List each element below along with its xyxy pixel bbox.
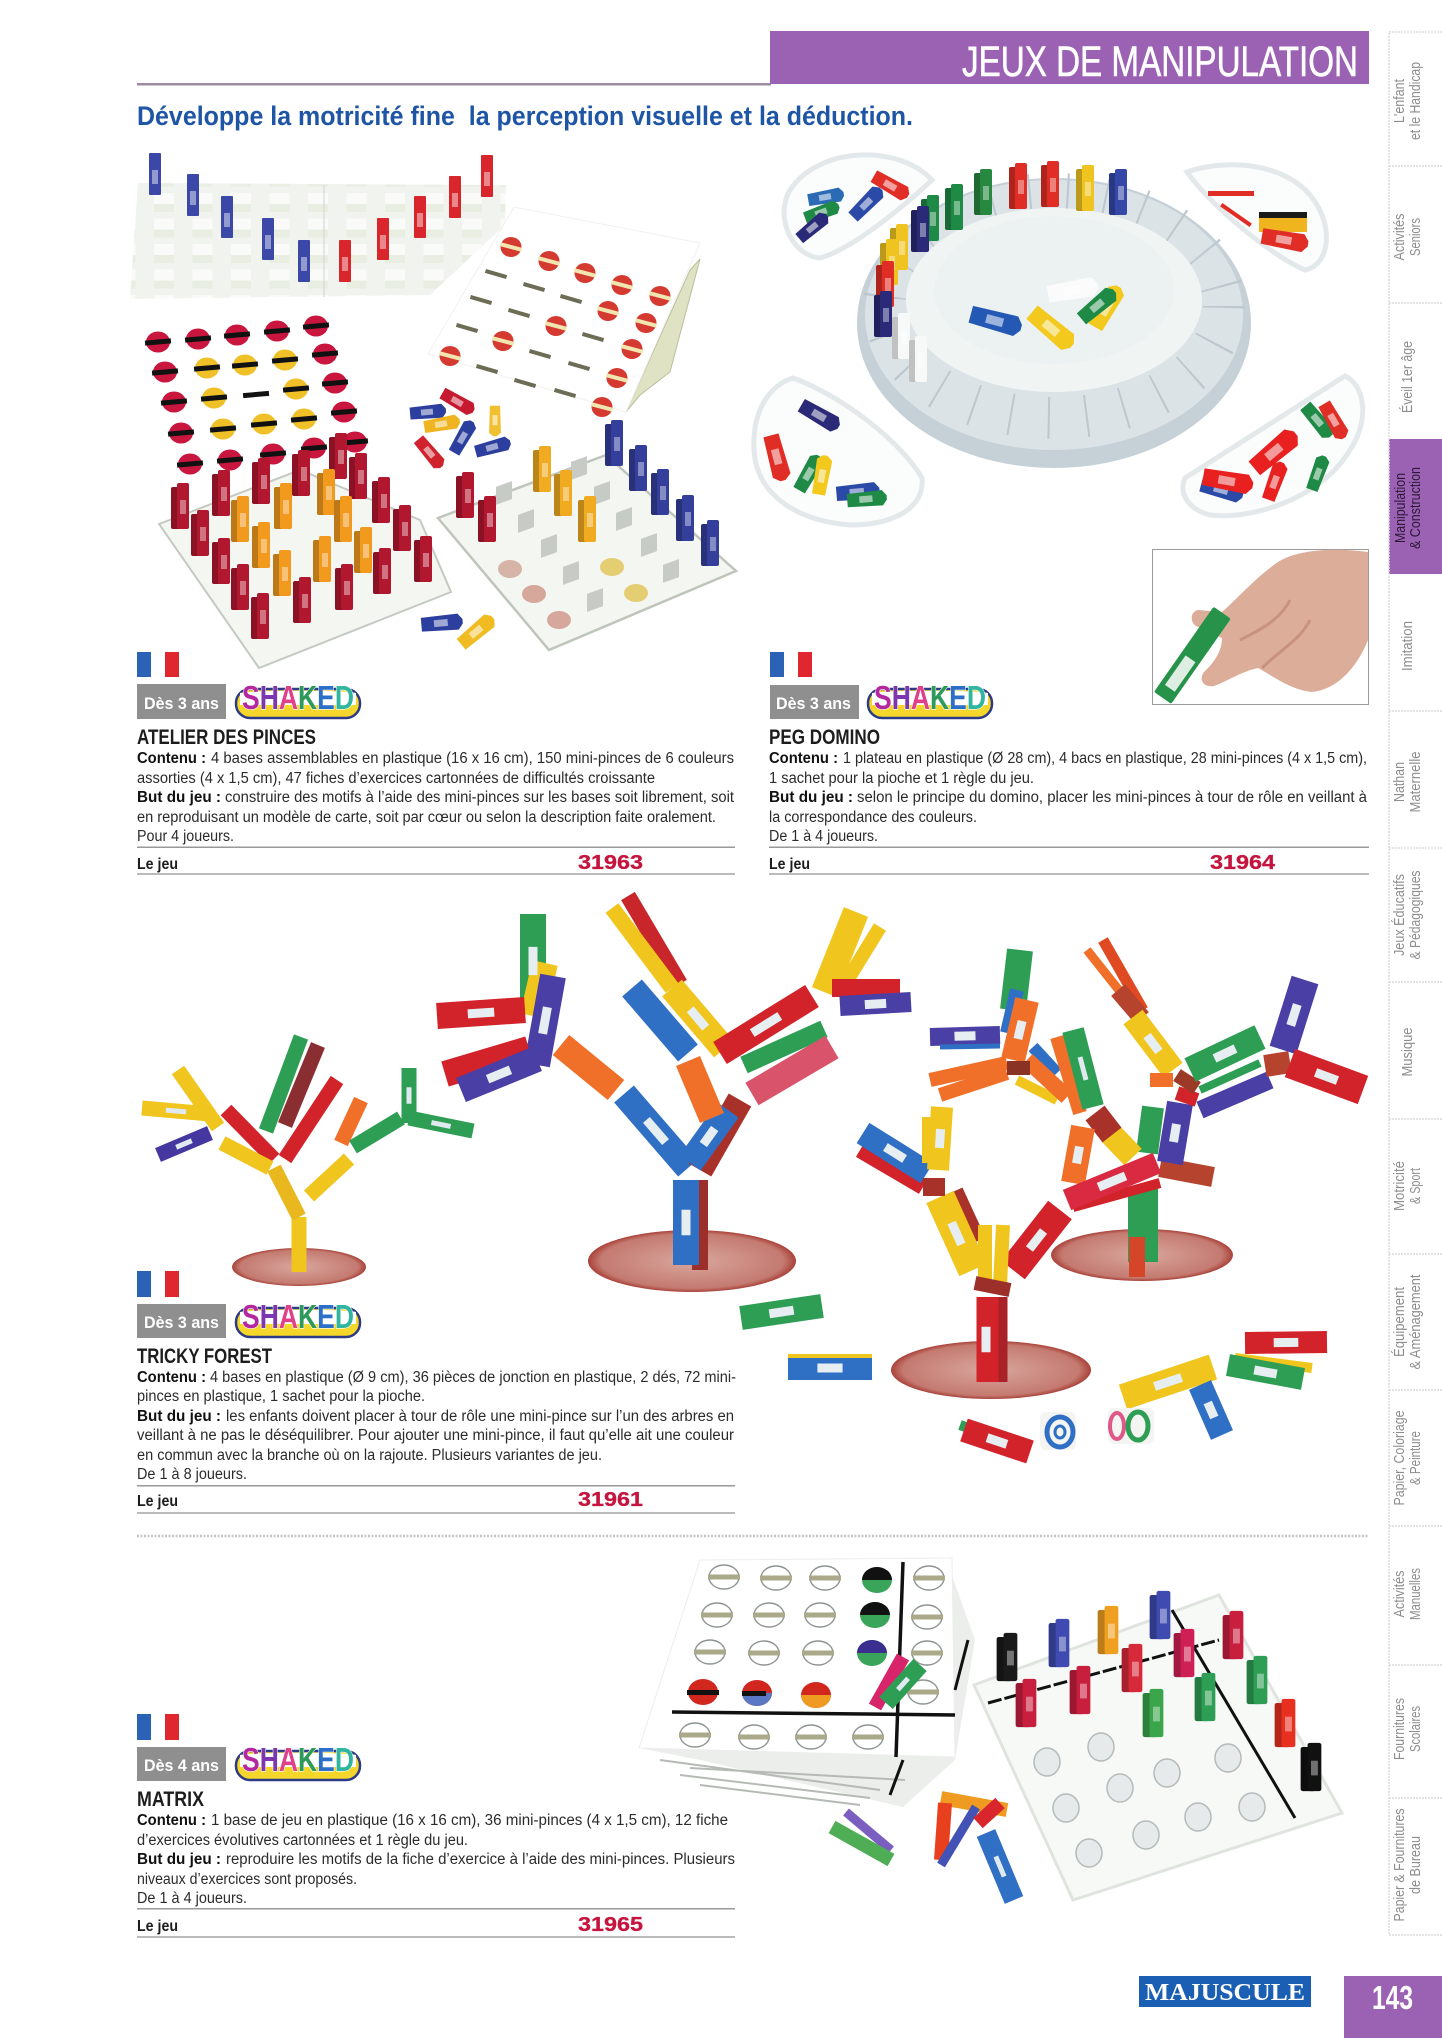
tab: manipulation active: [1393, 467, 1424, 549]
page number: 143: [1372, 1979, 1413, 2016]
loose mini-pinces: [409, 387, 512, 650]
age badge: [137, 1747, 226, 1781]
tab: handicap: et le Handicap: [1408, 62, 1424, 140]
price row: Le jeu: [137, 1493, 178, 1510]
price row: 31964: [1210, 852, 1276, 874]
product: atelier des pinces: [137, 652, 735, 875]
tab: motricite: & Sport: [1408, 1168, 1424, 1204]
description: Pour 4 joueurs.: [137, 828, 234, 845]
tab: activites manuelles: Manuelles: [1408, 1568, 1424, 1620]
shaked logo: SHAKED: [242, 1298, 354, 1335]
description: assorties (4 x 1,5 cm), 47 fiches d’exercices cartonnées de difficultés croissante: [137, 770, 655, 787]
tab: fournitures scolaires: Fournitures: [1392, 1698, 1408, 1760]
price row: [769, 846, 1369, 875]
front tree: [860, 1107, 1160, 1399]
description: d’exercices évolutives cartonnées et 1 règle du jeu.: [137, 1832, 468, 1849]
tab: manipulation active: & Construction: [1408, 467, 1424, 549]
tab: musique: Musique: [1400, 1028, 1416, 1076]
lower left board with pegs: [159, 433, 451, 668]
description: [137, 1812, 735, 1907]
round tray: [857, 178, 1251, 468]
price row: 31963: [578, 852, 643, 874]
tab: jeux educatifs: Jeux Éducatifs: [1391, 874, 1408, 956]
pegs on tray rim: [874, 161, 1127, 382]
age badge: Dès 4 ans: [144, 1756, 219, 1775]
product: peg domino: [769, 652, 1369, 875]
tab: nathan: Nathan: [1392, 762, 1408, 802]
tab: nathan: Maternelle: [1408, 752, 1424, 812]
tab: fournitures scolaires: Scolaires: [1408, 1706, 1424, 1752]
price row: 31965: [578, 1914, 643, 1936]
age badge: [137, 1304, 226, 1338]
description: veillant à ne pas le déséquilibrer. Pour ajouter une mini-pince, il faut qu’elle ait une couleur: [137, 1427, 734, 1444]
product title: TRICKY FOREST: [137, 1345, 272, 1368]
tab: fournitures bureau: de Bureau: [1408, 1836, 1424, 1894]
bowl: top right: [1187, 165, 1326, 270]
top board with blue and red pegs: [130, 153, 506, 299]
bowl: bottom right: [1183, 376, 1363, 516]
bowl: bottom left: [754, 378, 922, 525]
description: la correspondance des couleurs.: [769, 809, 977, 826]
illustration: matrix: [639, 1558, 1342, 1900]
illustration: tricky forest trees: [142, 896, 1363, 1452]
description: Contenu :: [769, 750, 838, 767]
description: reproduire les motifs de la fiche d’exercice à l’aide des mini-pinces. Plusieurs: [226, 1851, 735, 1868]
left card red and yellow discs: [145, 316, 368, 474]
tab: papier coloriage: [1392, 1410, 1424, 1506]
description: en reproduisant un modèle de carte, soit par cœur ou selon la description faite oralement.: [137, 809, 716, 826]
illustration: atelier des pinces: [130, 153, 736, 668]
flag: [137, 1271, 179, 1297]
description: [137, 1369, 736, 1483]
product title: PEG DOMINO: [769, 726, 880, 749]
tab: jeux educatifs: [1391, 870, 1424, 960]
age badge: [770, 685, 859, 719]
tab: manipulation active: Manipulation: [1393, 473, 1409, 543]
illustration: peg domino: [754, 155, 1368, 704]
tab: equipement: [1391, 1274, 1424, 1370]
product: tricky forest: [137, 1271, 736, 1514]
loose clips and dice: [741, 1306, 1327, 1452]
side navigation tabs: [1389, 32, 1442, 1935]
description: Contenu :: [137, 1369, 206, 1386]
tab: fournitures bureau: [1392, 1808, 1424, 1922]
flag: [137, 652, 179, 677]
stack of exercise cards: [639, 1558, 975, 1807]
description: pinces en plastique, 1 sachet pour la pioche.: [137, 1388, 425, 1405]
tab: jeux educatifs: & Pédagogiques: [1408, 870, 1424, 960]
description: De 1 à 4 joueurs.: [137, 1890, 247, 1907]
right game board: [974, 1591, 1342, 1900]
description: selon le principe du domino, placer les mini-pinces à tour de rôle en veillant à: [857, 789, 1367, 806]
tab: handicap: L'enfant: [1392, 79, 1408, 123]
shaked logo: SHAKED: [874, 679, 986, 716]
inset photo: hand holding green clip: [1152, 550, 1368, 704]
tab: motricite: [1392, 1161, 1424, 1211]
description: 1 base de jeu en plastique (16 x 16 cm), 36 mini-pinces (4 x 1,5 cm), 12 fiche: [211, 1812, 728, 1829]
pegs in tray centre: [968, 276, 1127, 354]
tab: fournitures bureau: Papier & Fournitures: [1392, 1808, 1408, 1922]
price row: Le jeu: [769, 856, 810, 873]
description: But du jeu :: [137, 789, 221, 806]
tab: eveil: Éveil 1er âge: [1399, 341, 1416, 413]
age badge: Dès 3 ans: [144, 1313, 219, 1332]
tab: seniors: Seniors: [1408, 218, 1424, 256]
rear tree: [930, 940, 1363, 1281]
header banner: [137, 31, 1369, 86]
tab: papier coloriage: Papier, Coloriage: [1392, 1410, 1408, 1506]
price row: [137, 846, 735, 875]
price row: Le jeu: [137, 1918, 178, 1935]
description: [769, 750, 1367, 845]
flag: [137, 1714, 179, 1740]
tab: equipement: & Aménagement: [1408, 1274, 1424, 1370]
tab: handicap: [1392, 62, 1424, 140]
page number: [1344, 1976, 1442, 2038]
medium tree: [437, 896, 911, 1292]
shaked logo: SHAKED: [242, 679, 354, 716]
loose matrix clips: [832, 1798, 1014, 1900]
pattern card with page edges: [428, 207, 700, 417]
tab: motricite: Motricité: [1392, 1161, 1408, 1211]
tab: papier coloriage: & Peinture: [1408, 1431, 1424, 1485]
dotted section divider: [137, 1535, 1369, 1537]
tab: seniors: [1392, 214, 1424, 260]
description: Contenu :: [137, 750, 206, 767]
age badge: Dès 3 ans: [776, 694, 851, 713]
price row: [137, 1908, 735, 1938]
page heading: Développe la motricité fine la perception visuelle et la déduction.: [137, 101, 913, 131]
tab: activites manuelles: Activités: [1392, 1570, 1408, 1618]
tab: fournitures scolaires: [1392, 1698, 1424, 1760]
shaked logo: SHAKED: [242, 1741, 354, 1778]
description: But du jeu :: [137, 1851, 221, 1868]
description: en commun avec la branche où on la rajoute. Plusieurs variantes de jeu.: [137, 1447, 602, 1464]
bowl: top left: [784, 155, 932, 258]
description: But du jeu :: [137, 1408, 221, 1425]
flag: [770, 652, 812, 677]
price row: [137, 1485, 735, 1514]
price row: 31961: [578, 1489, 643, 1511]
description: De 1 à 4 joueurs.: [769, 828, 878, 845]
description: De 1 à 8 joueurs.: [137, 1466, 247, 1483]
age badge: Dès 3 ans: [144, 694, 219, 713]
description: 4 bases assemblables en plastique (16 x 16 cm), 150 mini-pinces de 6 couleurs: [211, 750, 734, 767]
product title: ATELIER DES PINCES: [137, 726, 316, 749]
small tree: [142, 1037, 473, 1286]
description: construire des motifs à l’aide des mini-pinces sur les bases soit librement, soit: [225, 789, 735, 806]
tab: imitation: Imitation: [1400, 621, 1416, 671]
tab: activites manuelles: [1392, 1568, 1424, 1620]
product title: MATRIX: [137, 1788, 204, 1811]
tab: seniors: Activités: [1392, 214, 1408, 260]
tab: nathan: [1392, 752, 1424, 812]
tab: equipement: Équipement: [1391, 1287, 1408, 1357]
footer brand logo: MAJUSCULE: [1145, 1980, 1305, 2006]
description: les enfants doivent placer à tour de rôle une mini-pince sur l’un des arbres en: [226, 1408, 734, 1425]
description: 1 plateau en plastique (Ø 28 cm), 4 bacs en plastique, 28 mini-pinces (4 x 1,5 cm),: [843, 750, 1367, 767]
description: niveaux d’exercices sont proposés.: [137, 1871, 357, 1888]
description: 4 bases en plastique (Ø 9 cm), 36 pièces de jonction en plastique, 2 dés, 72 mini-: [210, 1369, 736, 1386]
description: Contenu :: [137, 1812, 206, 1829]
age badge: [137, 684, 226, 719]
description: But du jeu :: [769, 789, 853, 806]
product: matrix: [137, 1714, 735, 1938]
price row: Le jeu: [137, 856, 178, 873]
lower right board with pegs: [438, 420, 736, 650]
description: [137, 750, 735, 845]
description: 1 sachet pour la pioche et 1 règle du jeu.: [769, 770, 1034, 787]
